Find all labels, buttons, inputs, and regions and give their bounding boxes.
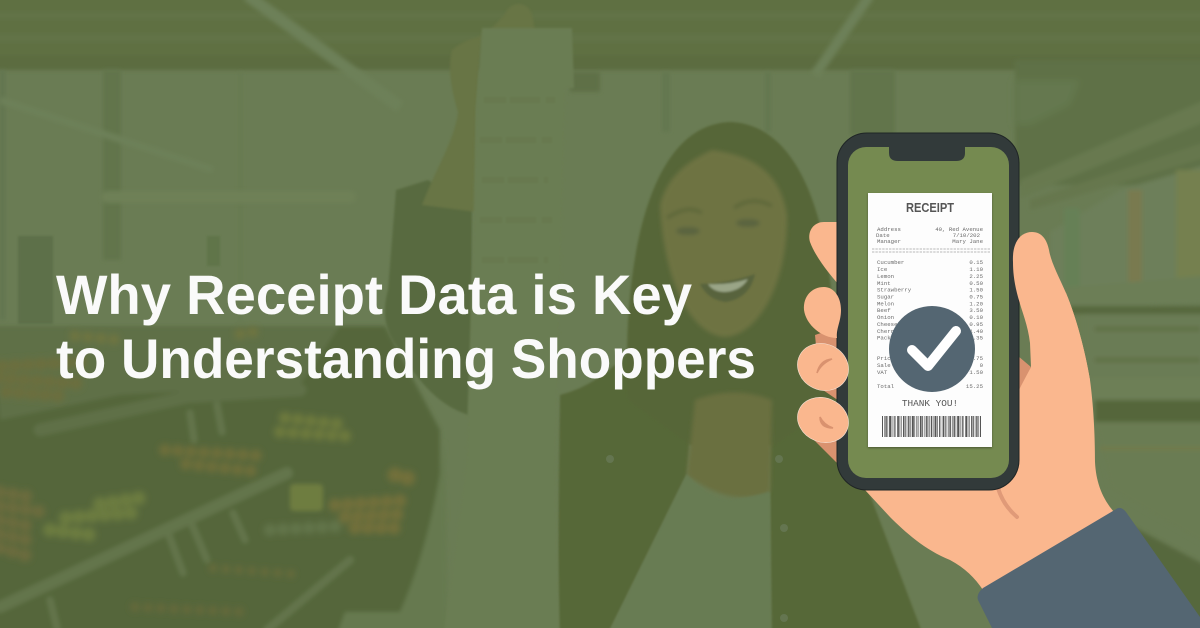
right hand store shelves <box>1015 60 1200 628</box>
receipt heading: RECEIPT <box>906 201 954 215</box>
receipt totals: Total <box>877 383 895 390</box>
woman: receipt strip <box>443 28 574 628</box>
receipt header details <box>876 226 984 245</box>
receipt totals: 0 <box>980 362 984 369</box>
receipt line items: Package <box>877 334 901 342</box>
receipt line items: 0.95 <box>969 321 984 328</box>
receipt line items: 1.50 <box>969 286 984 294</box>
wall window gaps <box>0 70 895 322</box>
hand: finger shadows <box>812 325 845 470</box>
receipt totals: 15.25 <box>966 383 984 390</box>
receipt line items: 0.15 <box>969 259 984 266</box>
hand: thumb <box>1013 232 1090 380</box>
little finger <box>791 390 855 450</box>
phone body <box>837 133 1019 490</box>
woman: raised hand and arm <box>422 4 535 212</box>
woman: jacket buttons <box>606 455 788 622</box>
woman: jacket <box>385 180 925 628</box>
illustration: hand holding phone <box>790 133 1200 628</box>
hand: palm <box>865 293 1114 600</box>
woman with long receipt <box>385 4 925 628</box>
hand: palm crease <box>998 488 1017 517</box>
receipt header details: Manager <box>877 238 901 245</box>
receipt line items: Strawberry <box>877 286 912 294</box>
sleeve <box>978 508 1200 628</box>
title <box>56 263 756 390</box>
hanging signs <box>18 236 220 324</box>
receipt totals: 1.50 <box>969 369 984 376</box>
ring finger <box>790 335 856 399</box>
receipt line items: Lemon <box>877 273 894 280</box>
thank you message: THANK YOU! <box>902 398 958 409</box>
phone screen <box>848 147 1009 478</box>
woman: smile <box>700 274 755 302</box>
title: to Understanding Shoppers <box>56 327 756 390</box>
ceiling band <box>0 0 1200 70</box>
middle finger <box>804 287 841 338</box>
hand: thumb web shadow <box>1018 356 1031 392</box>
receipt totals: Sale <box>877 362 891 369</box>
receipt line items: 0.35 <box>969 334 984 342</box>
receipt line items: 0.10 <box>969 314 984 321</box>
receipt line items: 0.50 <box>969 280 984 287</box>
receipt line items: 1.10 <box>969 266 984 273</box>
receipt line items: 3.50 <box>969 307 984 314</box>
receipt line items: Cheese <box>877 321 898 328</box>
produce stands lower left <box>0 326 448 628</box>
receipt line items: 1.40 <box>969 328 984 335</box>
receipt totals: 13.75 <box>966 355 984 362</box>
ring fingernail <box>817 359 832 373</box>
hand: fingers over phone <box>790 287 856 450</box>
receipt header details: Mary Jane <box>952 238 984 245</box>
receipt header details: 7/10/202 <box>953 232 981 239</box>
little fingernail <box>820 417 833 428</box>
receipt totals <box>877 355 984 390</box>
receipt header details: Date <box>876 232 890 239</box>
barcode <box>882 416 981 437</box>
woman: white top <box>605 475 772 628</box>
receipt line items: Onion <box>877 314 894 321</box>
fruit clusters <box>0 330 415 612</box>
receipt header details: Address <box>877 226 901 233</box>
title: Why Receipt Data is Key <box>56 263 692 326</box>
receipt totals: VAT <box>877 369 888 376</box>
receipt line items: Cherry <box>877 328 898 335</box>
receipt totals: Price <box>877 355 895 362</box>
hand: index finger <box>809 222 845 292</box>
woman: hair <box>627 122 840 445</box>
receipt line items: Sugar <box>877 294 894 300</box>
receipt line items: 0.75 <box>969 294 984 300</box>
receipt line items: Beef <box>877 307 891 314</box>
receipt line items: 2.25 <box>969 273 984 280</box>
receipt line items: Cucumber <box>877 259 904 266</box>
receipt line items: Melon <box>877 300 894 308</box>
receipt header details: 40, Red Avenue <box>935 226 984 233</box>
phone notch <box>889 146 965 161</box>
woman: chest <box>687 392 772 497</box>
check badge <box>889 306 975 392</box>
receipt line items: Ice <box>877 266 888 273</box>
receipt line items: Mint <box>877 280 891 287</box>
fruit crate <box>290 484 323 511</box>
receipt card <box>868 193 992 447</box>
receipt line items <box>877 259 984 342</box>
receipt line items: 1.20 <box>969 300 984 308</box>
woman: face <box>660 150 787 337</box>
ceiling beams <box>0 0 870 197</box>
